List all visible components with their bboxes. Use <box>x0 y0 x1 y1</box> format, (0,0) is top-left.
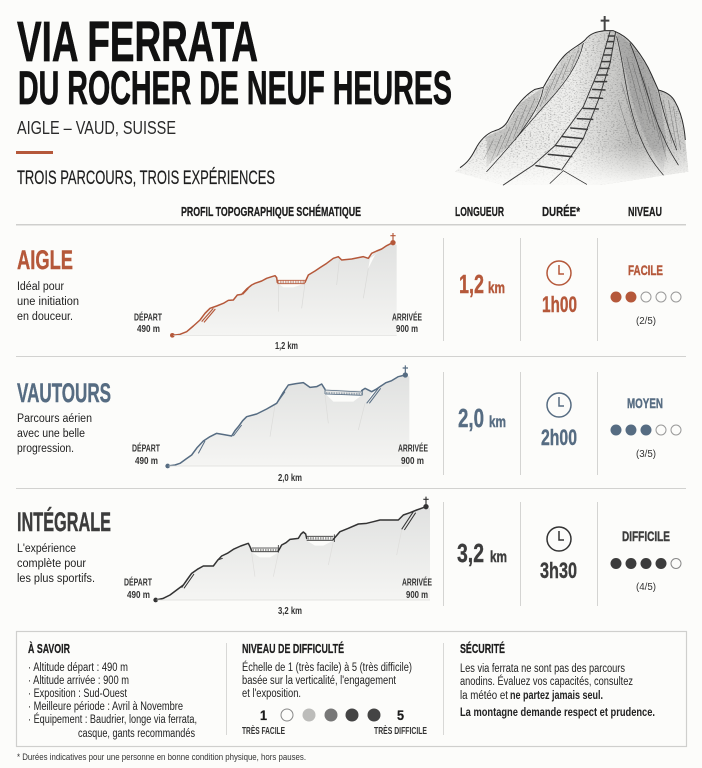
block: sécurité: la météo et <box>460 690 509 702</box>
route description: une initiation <box>17 296 79 308</box>
route description: les plus sportifs. <box>17 573 95 585</box>
level dots <box>610 292 681 302</box>
route name: INTÉGRALE <box>17 506 111 537</box>
table column headers <box>181 204 662 219</box>
block: sécurité: La montagne demande respect et prudence. <box>460 707 655 719</box>
labels: start, finish, distance: 490 m <box>137 324 160 335</box>
icon: clock <box>547 261 571 285</box>
block: à savoir: À SAVOIR <box>28 641 70 656</box>
block: sécurité: ne partez jamais seul. <box>510 690 603 702</box>
block: niveau de difficulté: basée sur la verticalité, l'engagement <box>242 675 397 687</box>
footnote: * Durées indicatives pour une personne en bonne condition physique, hors pauses. <box>17 752 306 763</box>
level label: FACILE <box>628 262 663 278</box>
labels: start, finish, distance <box>124 576 432 617</box>
length value: km <box>489 414 506 431</box>
difficulty scale <box>242 707 427 737</box>
length value: km <box>488 280 505 297</box>
difficulty scale: 1 <box>260 707 267 723</box>
labels: start, finish, distance: DÉPART <box>134 310 162 324</box>
block: à savoir: · Exposition : Sud-Ouest <box>28 688 128 700</box>
difficulty scale: TRÈS FACILE <box>242 724 285 737</box>
labels: start, finish, distance: ARRIVÉE <box>392 310 422 324</box>
labels: start, finish, distance: ARRIVÉE <box>402 576 432 588</box>
level label: MOYEN <box>627 395 663 411</box>
block: sécurité: anodins. Évaluez vos capacités, consultez <box>460 675 633 688</box>
elevation profile: Intégrale <box>153 497 430 602</box>
ladder <box>503 32 616 185</box>
title: VIA FERRATA <box>17 10 258 74</box>
labels: start, finish, distance <box>132 442 428 484</box>
labels: start, finish, distance: 900 m <box>406 590 428 601</box>
level label: DIFFICILE <box>622 528 670 544</box>
labels: start, finish, distance: 2,0 km <box>278 473 302 484</box>
difficulty scale: 5 <box>397 707 404 723</box>
block: à savoir <box>28 641 197 740</box>
elevation profile: Aigle <box>170 233 397 338</box>
length value: 2,0 <box>458 403 484 433</box>
route description <box>17 281 79 323</box>
route name: VAUTOURS <box>17 378 111 408</box>
table column headers: DURÉE* <box>542 204 581 219</box>
summit cross <box>601 16 609 31</box>
tagline: TROIS PARCOURS, TROIS EXPÉRIENCES <box>17 168 275 189</box>
accent rule <box>16 151 53 154</box>
duration value: 2h00 <box>541 425 577 450</box>
route description: Parcours aérien <box>17 413 92 425</box>
elevation profile: Vautours <box>165 365 409 468</box>
route name: AIGLE <box>17 245 73 275</box>
labels: start, finish, distance: 490 m <box>127 590 150 601</box>
title <box>17 10 452 114</box>
length value: 1,2 <box>459 269 484 299</box>
labels: start, finish, distance: 3,2 km <box>278 606 302 617</box>
labels: start, finish, distance: 490 m <box>135 456 158 467</box>
block: sécurité: Les via ferrata ne sont pas des parcours <box>460 663 625 675</box>
subtitle: location: AIGLE – VAUD, SUISSE <box>17 118 176 138</box>
level dots <box>610 558 681 569</box>
length value: km <box>490 549 507 566</box>
route description: avec une belle <box>17 428 85 440</box>
labels: start, finish, distance <box>134 310 422 352</box>
route description <box>17 413 92 455</box>
panel: Aigle route <box>17 233 681 352</box>
icon: clock <box>547 393 571 417</box>
block: à savoir: · Altitude départ : 490 m <box>28 662 128 674</box>
labels: start, finish, distance: 900 m <box>396 324 418 335</box>
route description: en douceur. <box>17 311 73 323</box>
route description: Idéal pour <box>17 281 64 293</box>
table column headers: NIVEAU <box>628 204 662 219</box>
panel: Intégrale route <box>17 497 681 617</box>
labels: start, finish, distance: 900 m <box>401 456 424 467</box>
block: niveau de difficulté: Échelle de 1 (très facile) à 5 (très difficile) <box>242 661 412 674</box>
route description: complète pour <box>17 558 86 570</box>
block: sécurité <box>460 641 655 719</box>
labels: start, finish, distance: DÉPART <box>132 442 160 454</box>
length value: 3,2 <box>457 538 484 568</box>
panel: Vautours route <box>17 365 681 484</box>
route description <box>17 543 95 585</box>
level score: (4/5) <box>636 582 656 593</box>
block: niveau de difficulté: et l'exposition. <box>242 688 301 700</box>
illustration: mountain with ladder and summit cross <box>450 16 693 187</box>
level dots <box>610 424 681 436</box>
level score: (2/5) <box>636 316 656 327</box>
table column headers: LONGUEUR <box>455 204 504 219</box>
route description: progression. <box>17 443 74 455</box>
block: niveau de difficulté <box>242 641 427 737</box>
block: à savoir: · Meilleure période : Avril à Novembre <box>28 701 183 713</box>
panel: information box <box>16 632 686 746</box>
table column headers: PROFIL TOPOGRAPHIQUE SCHÉMATIQUE <box>181 204 361 219</box>
difficulty scale: TRÈS DIFFICILE <box>374 724 427 737</box>
labels: start, finish, distance: DÉPART <box>124 576 152 588</box>
block: à savoir: · Altitude arrivée : 900 m <box>28 675 129 687</box>
labels: start, finish, distance: ARRIVÉE <box>398 442 428 454</box>
block: à savoir: casque, gants recommandés <box>78 728 195 740</box>
level score: (3/5) <box>636 449 656 460</box>
block: à savoir: · Équipement : Baudrier, longe via ferrata, <box>28 713 197 726</box>
duration value: 1h00 <box>542 292 577 317</box>
labels: start, finish, distance: 1,2 km <box>275 341 298 352</box>
duration value: 3h30 <box>540 558 577 583</box>
block: sécurité: SÉCURITÉ <box>460 641 505 656</box>
route description: L'expérience <box>17 543 76 555</box>
icon: clock <box>547 527 571 551</box>
block: niveau de difficulté: NIVEAU DE DIFFICULTÉ <box>242 641 344 656</box>
